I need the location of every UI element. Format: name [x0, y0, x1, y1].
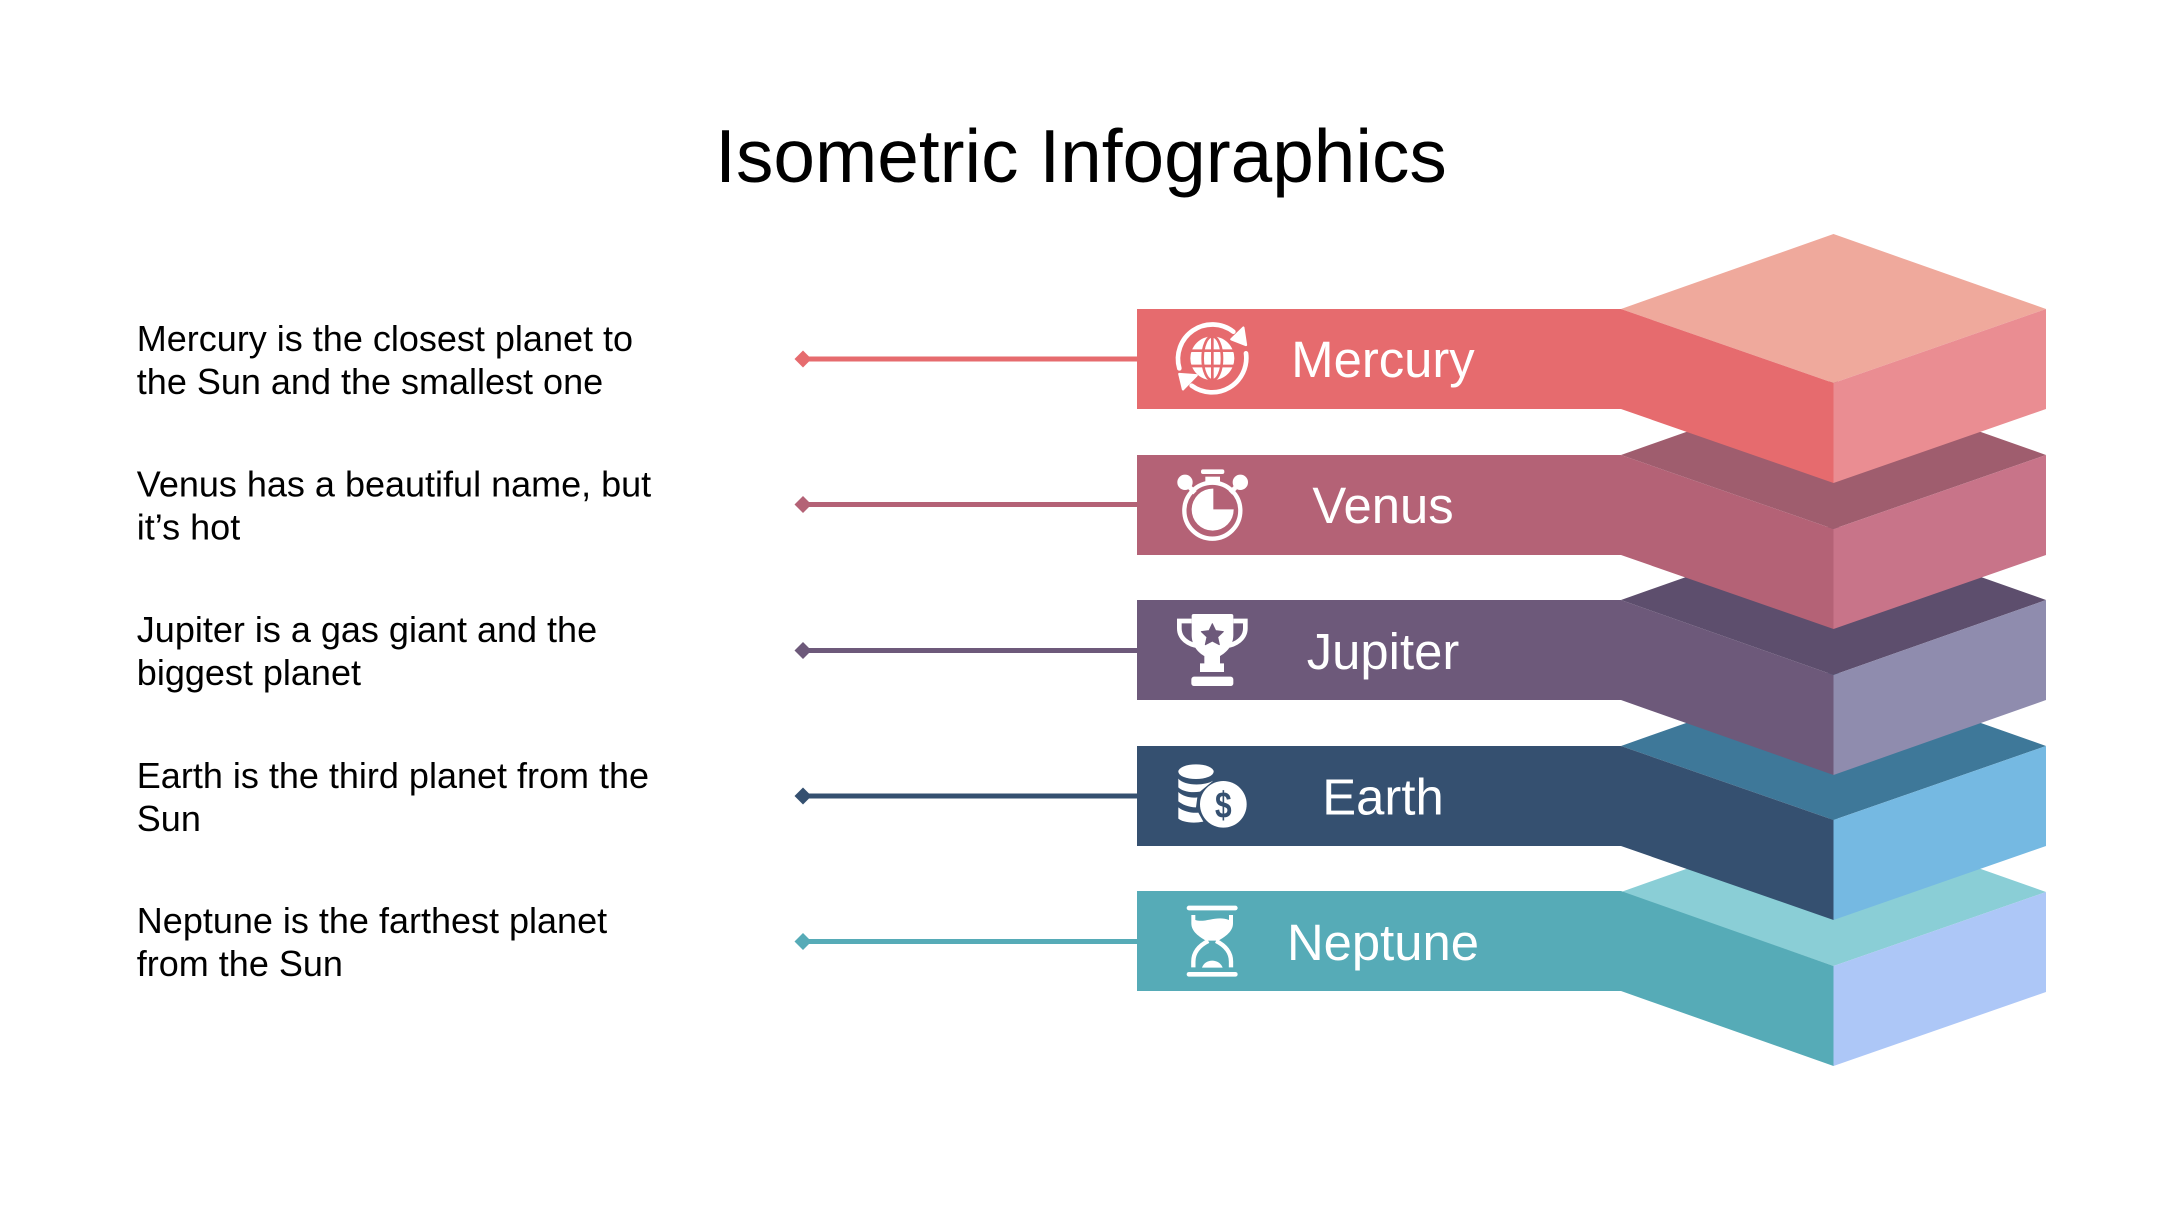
- text block: Venus description: it’s hot: [137, 506, 240, 548]
- text block: Jupiter description: Jupiter is a gas giant and the: [137, 609, 597, 650]
- icon: globe with arrows: [1178, 324, 1246, 392]
- label: Mercury: Mercury: [1291, 331, 1475, 388]
- label: Venus: Venus: [1312, 477, 1454, 534]
- connector: Jupiter: [794, 642, 1138, 659]
- title: Isometric Infographics: [715, 114, 1447, 198]
- text block: Mercury description: Mercury is the closest planet to: [137, 318, 633, 359]
- text block: Neptune description: from the Sun: [137, 943, 343, 984]
- text block: Mercury description: the Sun and the smallest one: [137, 361, 603, 402]
- connector: Venus: [794, 496, 1138, 513]
- text block: Jupiter description: biggest planet: [137, 652, 361, 693]
- label: Earth: Earth: [1322, 768, 1444, 826]
- icon: coins: [1178, 764, 1247, 828]
- label: Jupiter: Jupiter: [1307, 623, 1459, 680]
- connector: Mercury: [794, 350, 1138, 368]
- label: Neptune: Neptune: [1287, 914, 1479, 971]
- isometric block: Neptune: [1137, 817, 2046, 1066]
- isometric block: Mercury: [1137, 234, 2046, 483]
- icon: coins: $: [1215, 785, 1232, 826]
- isometric block: Jupiter: [1137, 525, 2046, 775]
- icon: trophy: [1179, 614, 1245, 686]
- connector: Neptune: [794, 933, 1138, 950]
- isometric block: Venus: [1137, 380, 2046, 629]
- isometric block: Earth: [1137, 671, 2046, 920]
- icon: stopwatch: [1177, 469, 1248, 539]
- text block: Neptune description: Neptune is the farthest planet: [137, 900, 607, 941]
- text block: Venus description: Venus has a beautiful name, but: [137, 464, 651, 504]
- icon: hourglass: [1187, 906, 1238, 977]
- text block: Earth description: Sun: [137, 798, 201, 839]
- text block: Earth description: Earth is the third planet from the: [137, 755, 649, 796]
- connector: Earth: [794, 788, 1138, 804]
